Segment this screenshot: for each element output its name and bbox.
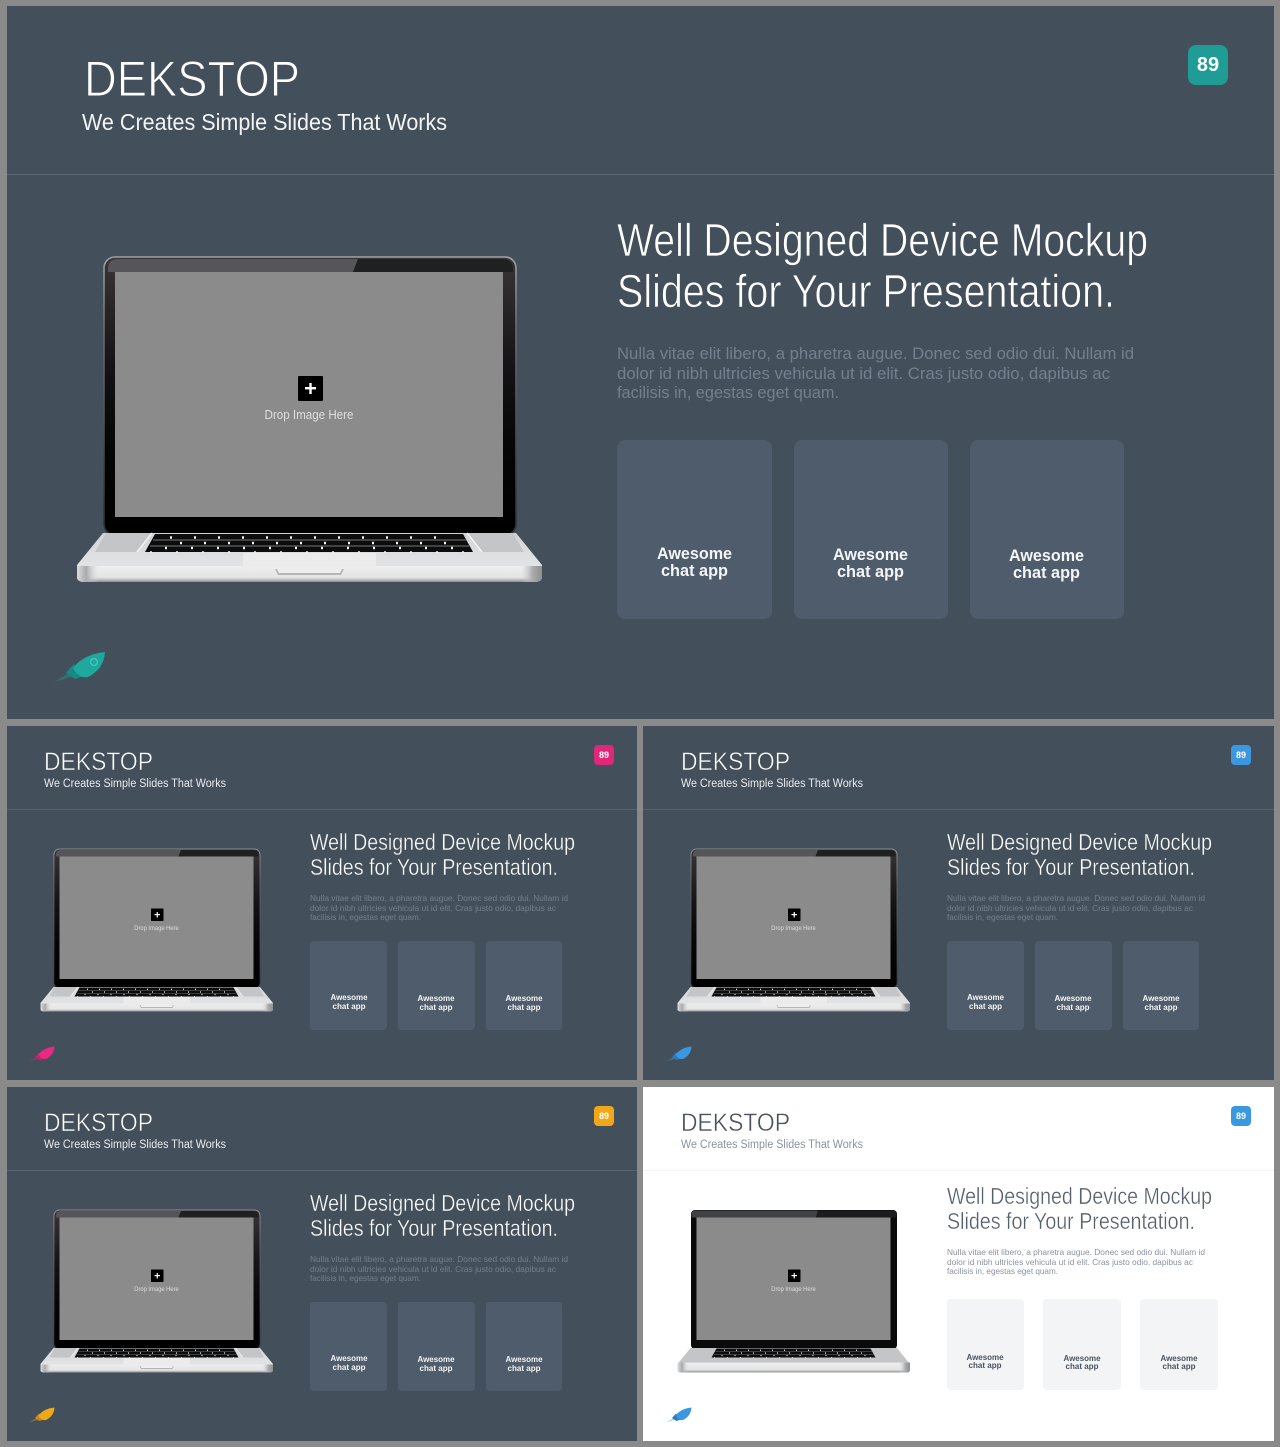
card 2: Awesome <box>418 993 455 1003</box>
card 3: chat app <box>1162 1361 1196 1371</box>
subtitle: We Creates Simple Slides That Works <box>44 778 226 790</box>
body paragraph <box>947 1248 1205 1276</box>
title: DEKSTOP <box>681 1109 790 1137</box>
card 2: Awesome <box>418 1354 455 1364</box>
laptop mockup: Drop Image Here <box>264 408 354 422</box>
body paragraph: dolor id nibh ultricies vehicula ut id elit. Cras justo odio, dapibus ac <box>310 1265 556 1274</box>
panel: pink slide <box>7 726 637 1080</box>
card 2: chat app <box>420 1363 452 1373</box>
card 2 <box>1043 1299 1121 1390</box>
card 3: Awesome <box>1160 1353 1198 1363</box>
laptop mockup <box>40 849 273 1012</box>
body paragraph <box>310 1255 568 1283</box>
card 1 <box>617 440 772 619</box>
body paragraph: Nulla vitae elit libero, a pharetra augue. Donec sed odio dui. Nullam id <box>947 894 1205 903</box>
heading <box>617 214 1148 317</box>
card 1: Awesome <box>330 992 368 1002</box>
body paragraph: dolor id nibh ultricies vehicula ut id elit. Cras justo odio, dapibus ac <box>617 365 1110 383</box>
page number badge: 89 <box>599 750 609 760</box>
page number badge <box>1231 1106 1251 1126</box>
card 3 <box>486 1302 562 1391</box>
body paragraph <box>947 894 1205 922</box>
card 1 <box>310 1302 387 1391</box>
title: DEKSTOP <box>681 748 790 776</box>
subtitle: We Creates Simple Slides That Works <box>82 109 447 135</box>
heading: Well Designed Device Mockup <box>310 829 575 855</box>
card 3 <box>970 440 1124 619</box>
body paragraph: Nulla vitae elit libero, a pharetra augue. Donec sed odio dui. Nullam id <box>947 1248 1205 1257</box>
laptop mockup <box>40 1210 273 1372</box>
card 1: chat app <box>969 1001 1002 1011</box>
card 3 <box>486 941 562 1030</box>
page number badge <box>1231 745 1251 765</box>
heading: Slides for Your Presentation. <box>310 1215 558 1241</box>
card 1: Awesome <box>967 992 1004 1002</box>
card 1: chat app <box>968 1360 1002 1370</box>
title: DEKSTOP <box>44 748 153 776</box>
panel: large teal slide <box>7 6 1274 719</box>
card 2: Awesome <box>1054 993 1092 1003</box>
page number badge <box>1188 45 1228 85</box>
card 1: chat app <box>332 1001 366 1011</box>
body paragraph <box>310 894 568 922</box>
laptop mockup <box>678 1210 910 1372</box>
body paragraph: dolor id nibh ultricies vehicula ut id elit. Cras justo odio, dapibus ac <box>310 904 556 913</box>
heading <box>947 1183 1212 1234</box>
laptop mockup <box>77 257 542 582</box>
laptop mockup: Drop Image Here <box>134 1286 179 1293</box>
page number badge: 89 <box>1236 1111 1246 1121</box>
laptop mockup: Drop Image Here <box>134 925 179 932</box>
card 3 <box>1140 1299 1218 1390</box>
card 3: Awesome <box>1142 993 1180 1003</box>
subtitle: We Creates Simple Slides That Works <box>44 1139 226 1151</box>
heading: Well Designed Device Mockup <box>617 214 1148 266</box>
icon: teal rocket <box>54 652 105 682</box>
body paragraph: facilisis in, egestas eget quam. <box>310 1274 421 1283</box>
card 2: Awesome <box>833 546 908 564</box>
heading: Slides for Your Presentation. <box>310 854 558 880</box>
heading: Well Designed Device Mockup <box>310 1190 575 1216</box>
card 2: chat app <box>1056 1002 1090 1012</box>
heading <box>947 829 1212 880</box>
heading: Slides for Your Presentation. <box>947 1208 1195 1234</box>
card 1: chat app <box>332 1362 366 1372</box>
heading: Slides for Your Presentation. <box>617 265 1115 317</box>
laptop mockup <box>678 849 910 1012</box>
card 1: Awesome <box>330 1353 368 1363</box>
title: DEKSTOP <box>44 1109 153 1137</box>
card 2: chat app <box>420 1002 452 1012</box>
card 3 <box>1123 941 1199 1030</box>
body paragraph: Nulla vitae elit libero, a pharetra augue. Donec sed odio dui. Nullam id <box>310 894 568 903</box>
card 1 <box>947 1299 1024 1390</box>
card 1: Awesome <box>657 545 732 563</box>
body paragraph: dolor id nibh ultricies vehicula ut id elit. Cras justo odio, dapibus ac <box>947 904 1193 913</box>
card 1: chat app <box>661 562 728 580</box>
card 3: chat app <box>1013 564 1080 582</box>
page number badge: 89 <box>1236 750 1246 760</box>
page number badge <box>594 745 614 765</box>
card 3: chat app <box>508 1363 540 1373</box>
body paragraph: facilisis in, egestas eget quam. <box>947 1267 1058 1276</box>
icon: blue rocket <box>666 1046 692 1062</box>
card 2: chat app <box>837 563 904 581</box>
heading: Slides for Your Presentation. <box>947 854 1195 880</box>
body paragraph <box>617 345 1134 402</box>
card 1 <box>947 941 1024 1030</box>
panel: white slide <box>643 1087 1274 1441</box>
icon: blue rocket <box>666 1408 692 1422</box>
card 3: Awesome <box>506 1354 543 1364</box>
heading <box>310 1190 575 1241</box>
icon: pink rocket <box>29 1046 54 1062</box>
card 3: chat app <box>1144 1002 1178 1012</box>
page number badge: 89 <box>599 1111 609 1121</box>
card 2: Awesome <box>1064 1353 1101 1363</box>
heading: Well Designed Device Mockup <box>947 829 1212 855</box>
heading: Well Designed Device Mockup <box>947 1183 1212 1209</box>
card 3: chat app <box>508 1002 540 1012</box>
card 2: chat app <box>1066 1361 1098 1371</box>
subtitle: We Creates Simple Slides That Works <box>681 778 863 790</box>
card 1 <box>310 941 387 1030</box>
laptop mockup: Drop Image Here <box>771 925 816 932</box>
body paragraph: facilisis in, egestas eget quam. <box>310 913 421 922</box>
laptop mockup: Drop Image Here <box>771 1286 816 1293</box>
title: DEKSTOP <box>84 51 300 107</box>
page number badge: 89 <box>1197 54 1219 76</box>
icon: amber rocket <box>29 1408 54 1422</box>
body paragraph: dolor id nibh ultricies vehicula ut id elit. Cras justo odio, dapibus ac <box>947 1258 1193 1267</box>
body paragraph: facilisis in, egestas eget quam. <box>947 913 1058 922</box>
page number badge <box>594 1106 614 1126</box>
body paragraph: Nulla vitae elit libero, a pharetra augue. Donec sed odio dui. Nullam id <box>310 1255 568 1264</box>
card 2 <box>398 941 475 1030</box>
card 3: Awesome <box>506 993 543 1003</box>
body paragraph: facilisis in, egestas eget quam. <box>617 384 839 402</box>
body paragraph: Nulla vitae elit libero, a pharetra augue. Donec sed odio dui. Nullam id <box>617 345 1134 363</box>
panel: blue slide <box>643 726 1274 1080</box>
card 2 <box>794 440 948 619</box>
card 1: Awesome <box>966 1352 1004 1362</box>
card 3: Awesome <box>1009 547 1084 565</box>
card 2 <box>398 1302 475 1391</box>
panel: amber slide <box>7 1087 637 1441</box>
heading <box>310 829 575 880</box>
subtitle: We Creates Simple Slides That Works <box>681 1139 863 1151</box>
card 2 <box>1035 941 1112 1030</box>
